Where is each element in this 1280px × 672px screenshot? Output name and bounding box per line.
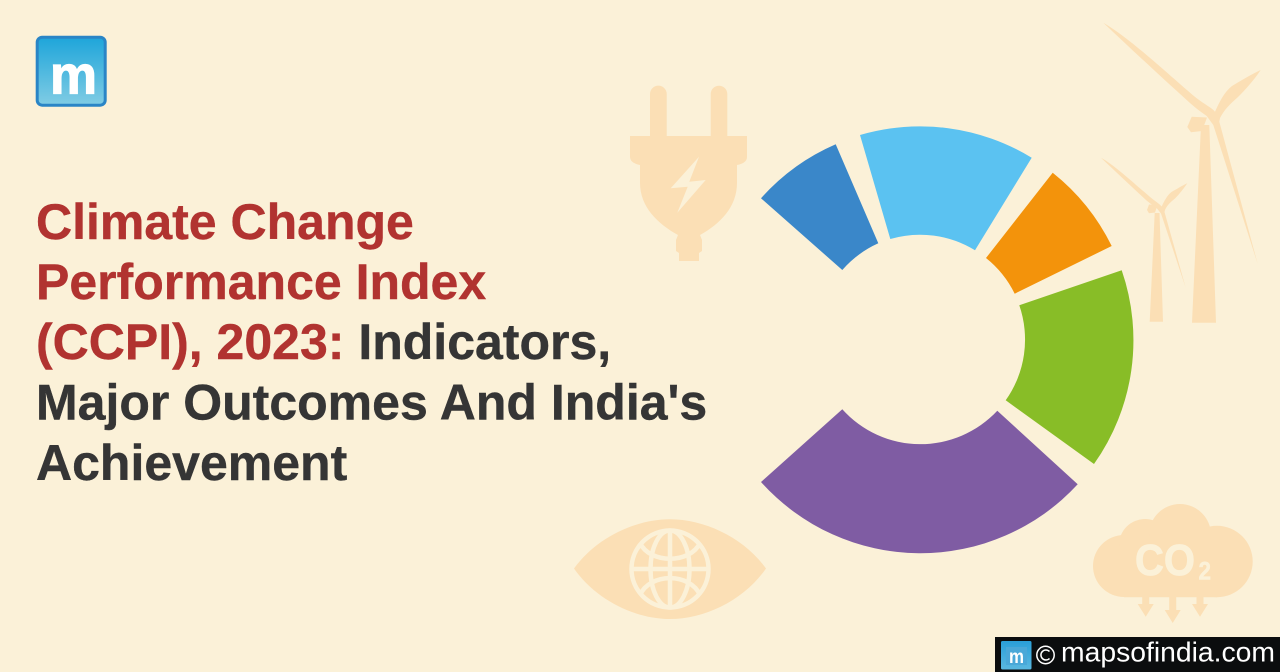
icon: down arrows [1138, 597, 1208, 623]
segment: purple [761, 409, 1078, 553]
title: Climate Change [36, 194, 414, 250]
title [36, 194, 707, 491]
title: Performance Index [36, 254, 486, 310]
title: (CCPI), 2023: Indicators, [36, 314, 611, 370]
logo: m [50, 46, 97, 106]
icon: CO2 cloud [1093, 504, 1253, 623]
donut chart [761, 126, 1133, 553]
copyright symbol [1037, 646, 1054, 664]
footer badge [995, 637, 1280, 672]
logo [37, 37, 105, 106]
title: Major Outcomes And India's [36, 374, 707, 430]
icon: plug [630, 86, 747, 261]
icon: CO2 cloud: 2 [1198, 557, 1211, 585]
icon: lightning bolt [671, 157, 706, 213]
segment: orange [986, 173, 1112, 294]
icon: small wind turbine [1101, 158, 1187, 322]
segment: dark blue [761, 144, 878, 270]
title: Achievement [36, 435, 348, 491]
icon: globe [632, 530, 708, 608]
footer logo [1001, 641, 1032, 670]
segment: light blue [860, 126, 1032, 250]
icon: large wind turbine [1103, 23, 1261, 323]
footer logo: m [1009, 647, 1024, 668]
icon: eye with globe [574, 519, 766, 619]
segment: green [1006, 270, 1133, 464]
footer site name: mapsofindia.com [1061, 637, 1275, 668]
CO2 label: CO [1135, 536, 1195, 585]
